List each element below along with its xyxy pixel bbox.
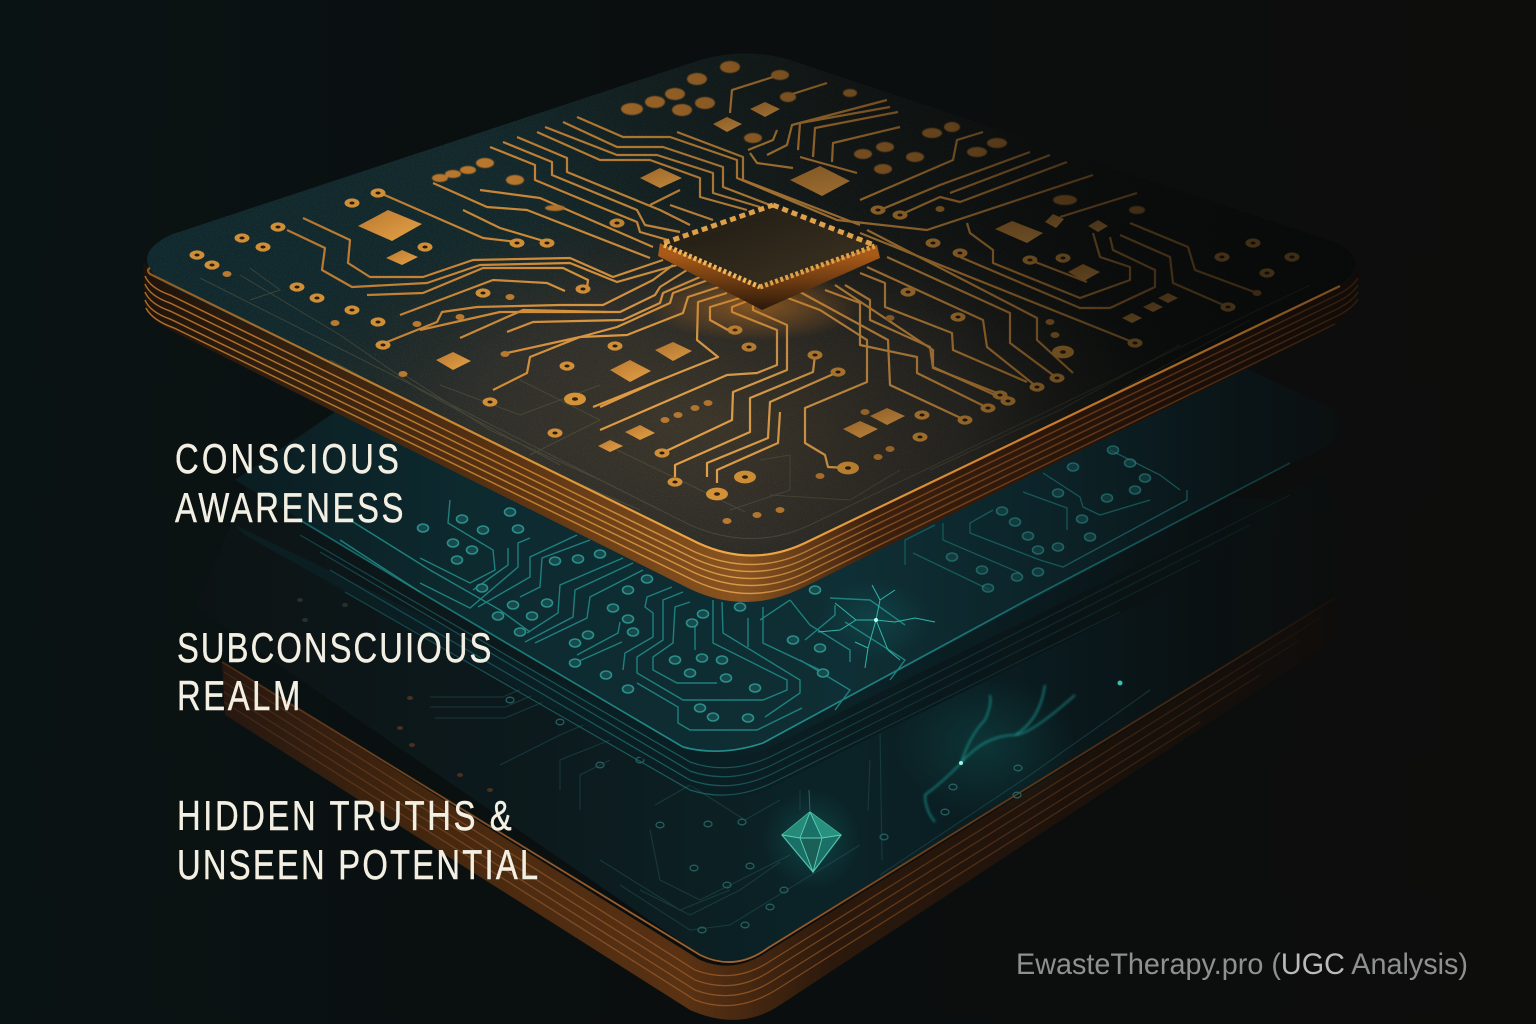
layer 3: hidden truths board xyxy=(195,480,1340,1020)
top board copper edge stack xyxy=(143,262,1360,602)
label: conscious awareness xyxy=(175,435,404,531)
right side dimming xyxy=(1022,162,1300,392)
glowing filament xyxy=(895,675,1122,822)
label: subconscious realm: SUBCONSCUIOUS xyxy=(177,624,491,671)
label: hidden truths and unseen potential: UNSEEN POTENTIAL xyxy=(177,841,538,888)
label: hidden truths and unseen potential: HIDDEN TRUTHS & xyxy=(177,792,512,839)
back and right dimming xyxy=(517,54,1348,513)
warm light pool xyxy=(354,240,1058,554)
top board face xyxy=(147,54,1355,556)
layer 1: conscious awareness board xyxy=(130,40,1370,602)
bottom board copper edge xyxy=(222,600,1335,1020)
middle board right vias xyxy=(946,446,1150,592)
bottom board face xyxy=(195,480,1340,962)
microchip xyxy=(645,205,880,341)
surface grain xyxy=(148,56,1040,554)
middle board circuit traces xyxy=(340,500,905,730)
upper soft pads xyxy=(432,61,1145,214)
copper traces xyxy=(287,77,1257,483)
label: subconscious realm: REALM xyxy=(177,672,300,719)
label: conscious awareness: CONSCIOUS xyxy=(175,435,399,482)
label: hidden truths and unseen potential xyxy=(177,792,538,888)
watermark credit: EwasteTherapy.pro (UGC Analysis) xyxy=(1016,948,1468,981)
bottom board faint circuit xyxy=(430,685,1150,930)
middle board teal edge xyxy=(235,470,1330,796)
label: subconscious realm xyxy=(177,624,491,719)
neuron spark xyxy=(818,580,935,668)
vias and rings xyxy=(190,188,1300,524)
bottom board copper rim xyxy=(222,598,1335,962)
middle board bright rim xyxy=(300,463,1290,751)
top board surface and circuit xyxy=(148,54,1300,554)
surface mount pads xyxy=(358,102,1178,452)
icon: crystal diamond xyxy=(762,790,862,890)
faint background traces xyxy=(200,268,1310,538)
middle board vias xyxy=(418,508,828,722)
bottom board dots xyxy=(297,598,1022,933)
layer 2: subconscious board xyxy=(235,300,1342,796)
right side traces fading out xyxy=(905,450,1187,590)
middle board face xyxy=(235,300,1342,752)
top board bright rim xyxy=(148,268,1340,556)
label: conscious awareness: AWARENESS xyxy=(175,484,404,531)
